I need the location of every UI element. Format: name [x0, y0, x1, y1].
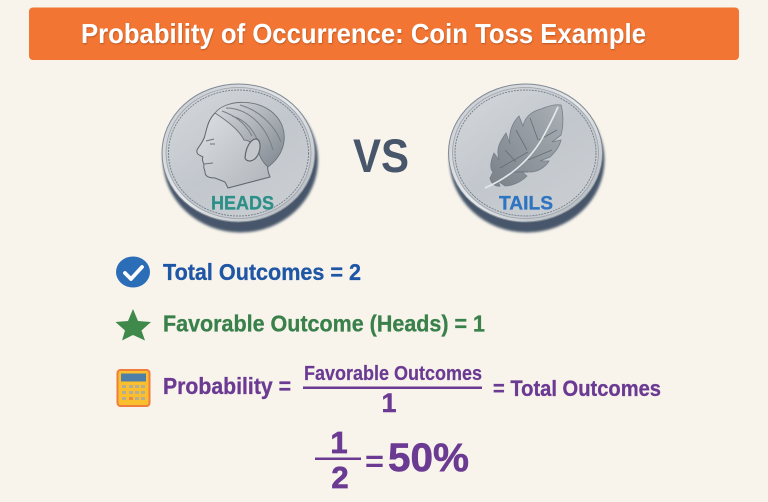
text: equals: =	[365, 445, 384, 478]
label: tails: TAILS	[499, 192, 553, 214]
text: total outcomes: Total Outcomes = 2	[163, 259, 361, 285]
title banner	[29, 8, 739, 60]
text: 50 percent: 50%	[388, 436, 469, 480]
fraction: one half: 2	[331, 460, 349, 495]
icon: star	[116, 309, 151, 340]
icon: check mark	[116, 256, 150, 288]
fraction: one half	[315, 425, 361, 495]
fraction: favorable outcomes over 1	[303, 363, 482, 418]
fraction: favorable outcomes over 1: Favorable Outcomes	[304, 363, 482, 385]
result: one half equals 50%	[315, 425, 469, 495]
row: probability formula	[118, 363, 661, 418]
icon: feather	[485, 105, 563, 188]
text: favorable outcome: Favorable Outcome (Heads) = 1	[163, 310, 485, 336]
fraction: one half: 1	[330, 425, 348, 460]
icon: calculator	[118, 370, 150, 406]
vs text: VS	[353, 129, 409, 182]
label: heads: HEADS	[211, 192, 274, 214]
text: equals total outcomes: = Total Outcomes	[493, 376, 661, 401]
row: favorable outcome	[116, 309, 485, 340]
icon: head profile	[197, 102, 284, 188]
row: total outcomes	[116, 256, 361, 288]
coin: heads	[162, 84, 318, 232]
title: Probability of Occurrence: Coin Toss Example	[81, 18, 646, 49]
fraction: favorable outcomes over 1: 1	[381, 388, 397, 418]
text: probability equals: Probability =	[163, 373, 291, 399]
coin: tails	[448, 84, 604, 232]
